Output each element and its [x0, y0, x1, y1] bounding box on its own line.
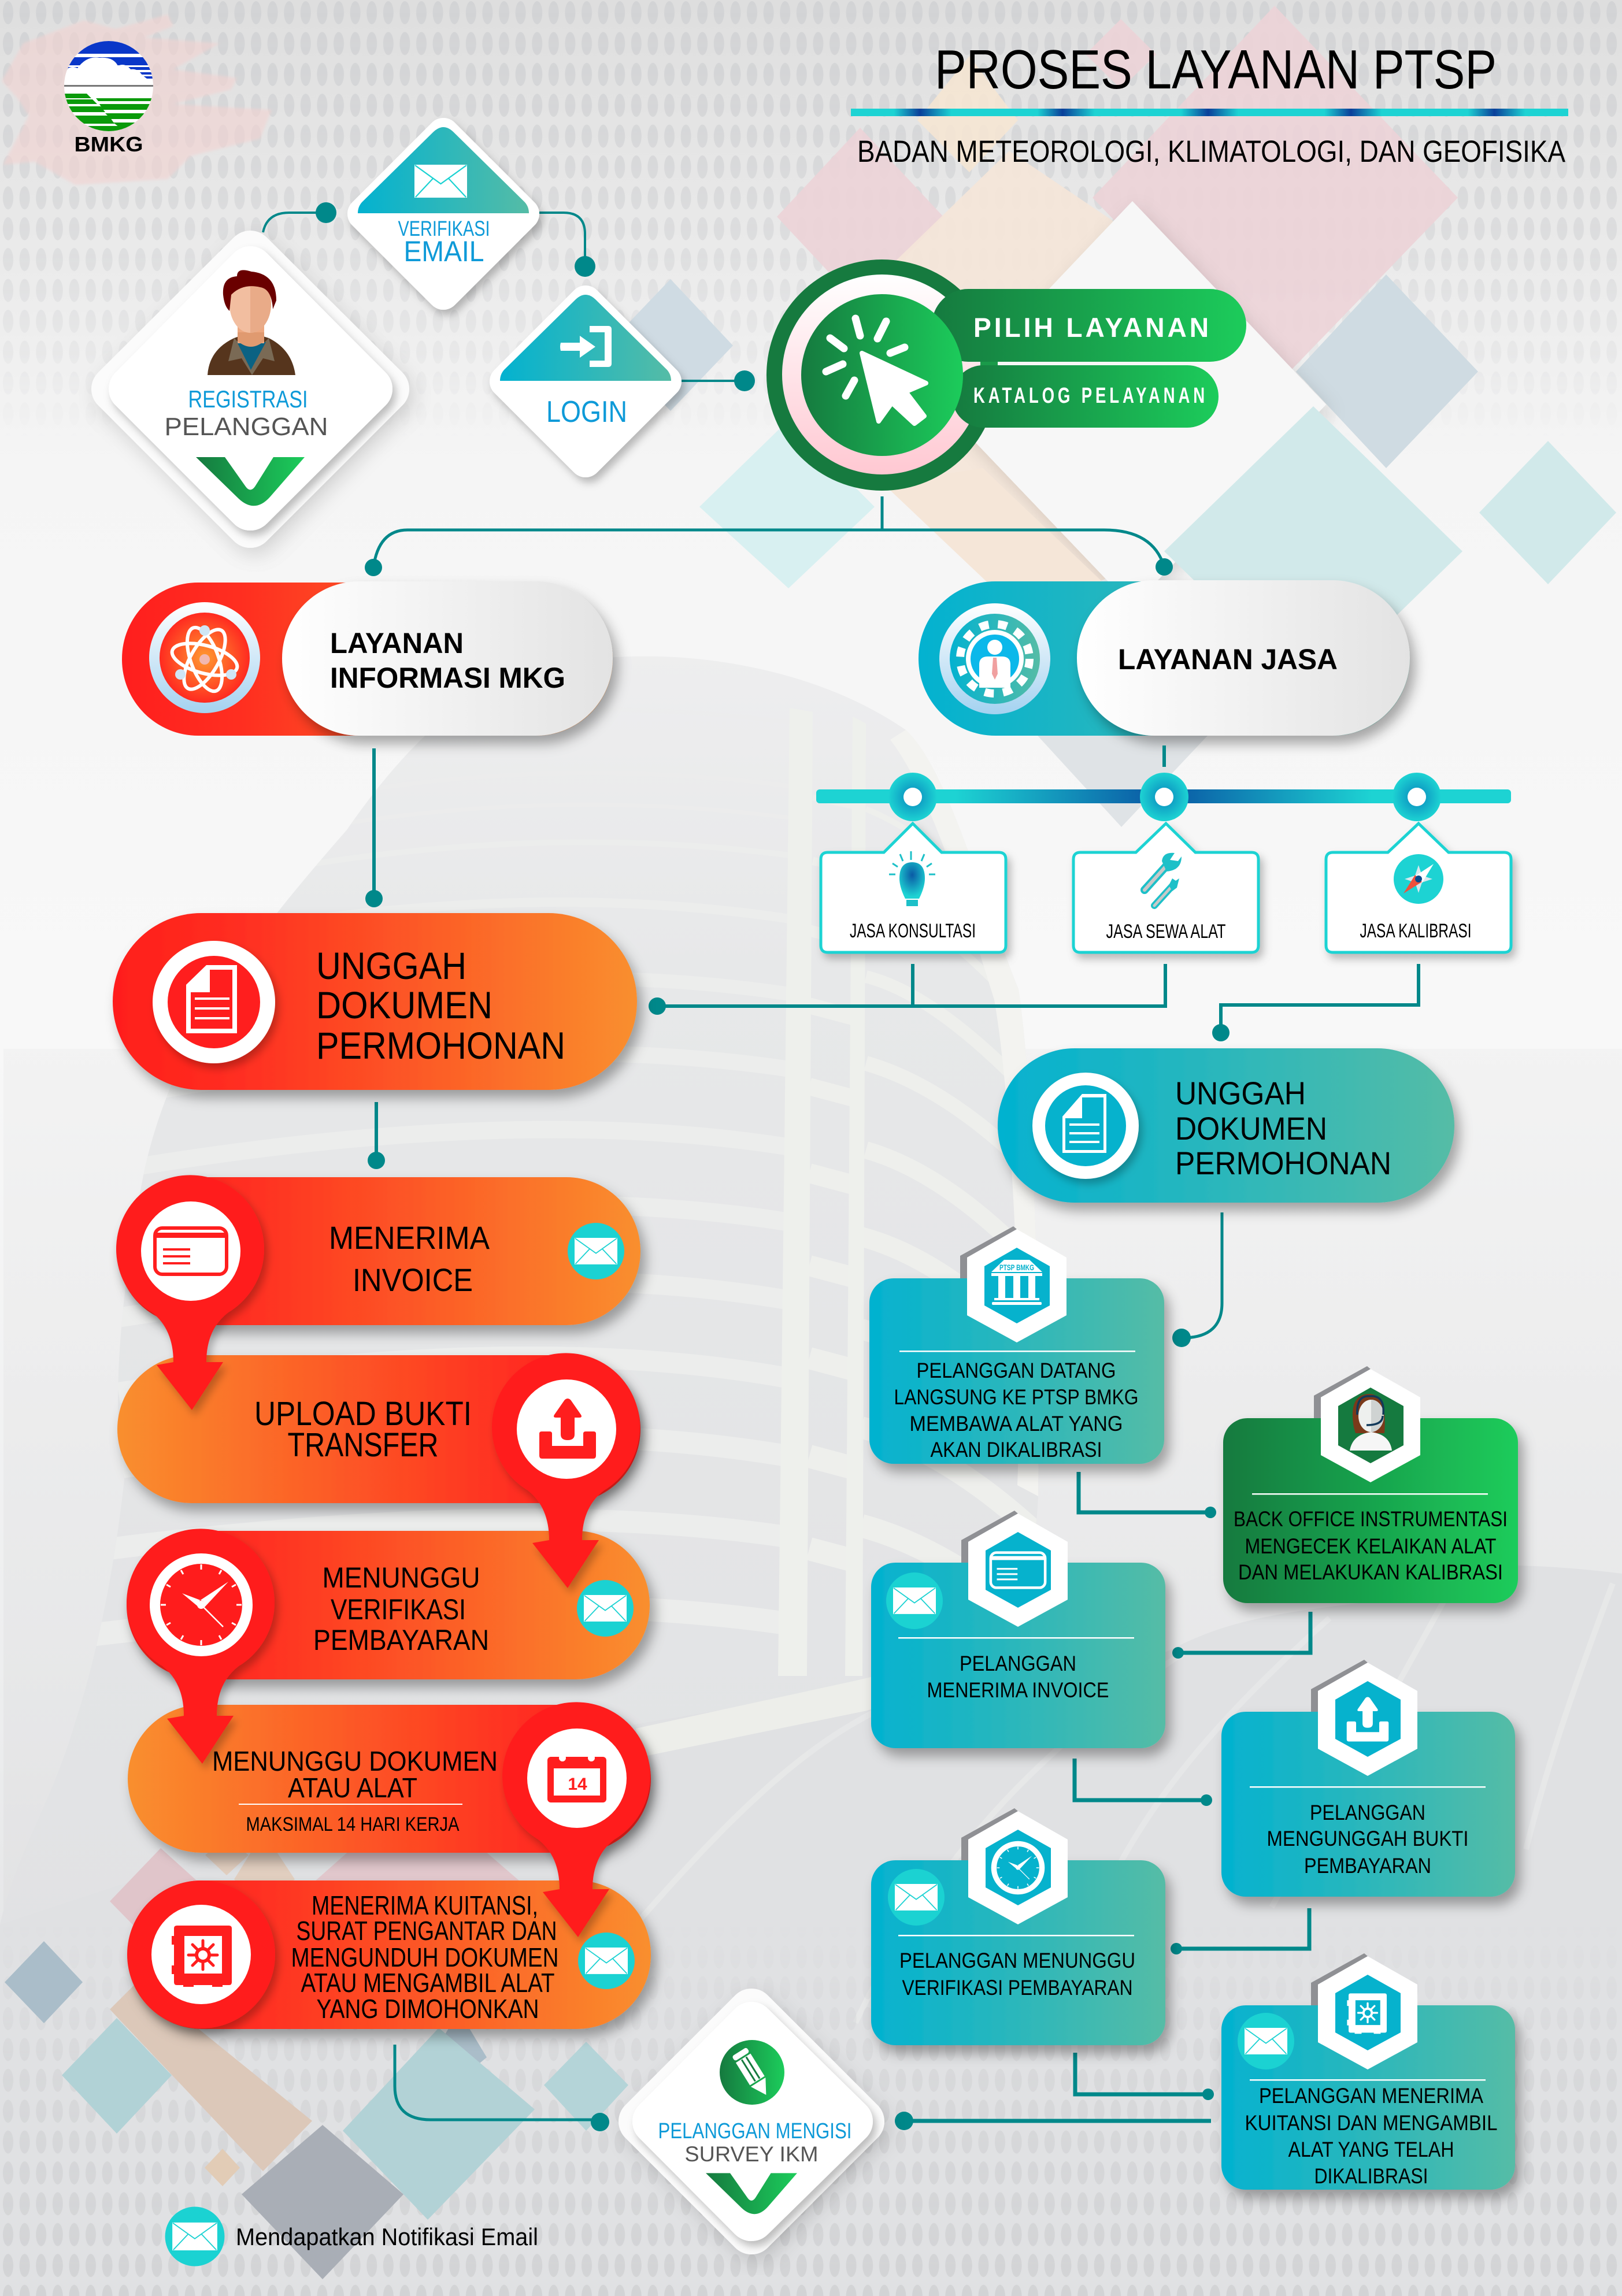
step: menunggu verifikasi pembayaran: PEMBAYARAN — [313, 1624, 489, 1656]
card: pelanggan mengunggah bukti — [1221, 1660, 1515, 1897]
panel: verifikasi email: VERIFIKASI — [398, 217, 490, 240]
icon: check mark — [196, 457, 305, 506]
card: pelanggan menerima kuitansi: ALAT YANG TELAH — [1288, 2138, 1454, 2161]
icon: clock — [994, 1844, 1042, 1892]
icon: email notification — [578, 1933, 635, 1989]
pill: katalog pelayanan — [952, 365, 1219, 428]
step: upload bukti transfer: UPLOAD BUKTI — [254, 1395, 472, 1433]
card: pelanggan mengunggah bukti: PEMBAYARAN — [1304, 1854, 1431, 1878]
icon: calendar — [547, 1755, 606, 1802]
step: upload bukti transfer — [254, 1353, 640, 1588]
icon: email notification — [577, 1580, 634, 1637]
step: menerima kuitansi: MENGUNDUH DOKUMEN — [291, 1942, 558, 1972]
panel: unggah dokumen permohonan teal: DOKUMEN — [1175, 1110, 1327, 1147]
step: menerima invoice: MENERIMA — [329, 1219, 490, 1256]
title: PROSES LAYANAN PTSP — [935, 39, 1497, 101]
panel: pilih layanan — [766, 259, 1246, 491]
panel: unggah dokumen permohonan red — [113, 913, 637, 1090]
panel: unggah dokumen permohonan teal: UNGGAH — [1175, 1075, 1306, 1111]
title underline bar — [851, 109, 1568, 116]
panel: unggah dokumen permohonan red: PERMOHONAN — [316, 1024, 565, 1067]
step: upload bukti transfer: TRANSFER — [288, 1426, 438, 1464]
background diamonds bottom left — [5, 1791, 628, 2279]
pill: pilih layanan — [932, 289, 1246, 362]
card: pelanggan menerima invoice: MENERIMA INVOICE — [927, 1678, 1109, 1702]
legend: Mendapatkan Notifikasi Email — [236, 2223, 538, 2250]
logo BMKG: BMKG — [74, 132, 143, 156]
icon: email notification — [888, 1869, 945, 1926]
panel: layanan jasa — [919, 580, 1410, 736]
icon: tools — [1145, 853, 1182, 906]
icon: email notification — [568, 1223, 624, 1279]
step: menerima kuitansi: YANG DIMOHONKAN — [317, 1994, 539, 2024]
panel: layanan informasi MKG — [122, 581, 613, 736]
card: pelanggan menerima invoice: PELANGGAN — [960, 1652, 1076, 1675]
card: pelanggan datang: PELANGGAN DATANG — [917, 1359, 1116, 1382]
card: pelanggan menerima kuitansi: DIKALIBRASI — [1314, 2164, 1428, 2188]
step: menunggu verifikasi pembayaran: VERIFIKASI — [331, 1593, 466, 1626]
step: menunggu verifikasi pembayaran: MENUNGGU — [323, 1561, 480, 1594]
icon: PTSP building: PTSP BMKG — [999, 1263, 1034, 1272]
panel: jasa konsultasi: JASA KONSULTASI — [850, 920, 976, 942]
icon: email notification — [886, 1572, 943, 1629]
panel: layanan informasi MKG: INFORMASI MKG — [330, 662, 565, 694]
panel: unggah dokumen permohonan red: DOKUMEN — [316, 984, 492, 1026]
icon: person — [208, 270, 295, 375]
step: menunggu verifikasi pembayaran — [127, 1529, 634, 1764]
panel: pilih layanan: KATALOG PELAYANAN — [973, 384, 1208, 408]
icon: gear person — [960, 624, 1030, 693]
panel: jasa sewa alat: JASA SEWA ALAT — [1106, 921, 1225, 943]
step: menunggu dokumen atau alat: MENUNGGU DOKUMEN — [212, 1746, 498, 1777]
step: menunggu dokumen atau alat: MAKSIMAL 14 HARI KERJA — [246, 1813, 460, 1835]
card: back office: DAN MELAKUKAN KALIBRASI — [1238, 1560, 1503, 1584]
card: pelanggan menerima kuitansi — [1221, 1953, 1515, 2190]
card: pelanggan mengunggah bukti: MENGUNGGAH BUKTI — [1267, 1827, 1468, 1850]
icon: safe — [1347, 1993, 1387, 2034]
card: back office: MENGECEK KELAIKAN ALAT — [1245, 1534, 1496, 1558]
panel: pilih layanan: PILIH LAYANAN — [973, 312, 1212, 343]
panel: login: LOGIN — [546, 395, 627, 429]
card: pelanggan datang — [869, 1226, 1164, 1464]
icon: email notification — [1238, 2013, 1294, 2069]
connectors top — [263, 202, 1173, 576]
panel: login — [500, 295, 671, 461]
panel: verifikasi email: EMAIL — [403, 235, 484, 268]
icon: PTSP building — [984, 1248, 1050, 1323]
card: pelanggan datang: LANGSUNG KE PTSP BMKG — [894, 1385, 1139, 1409]
icon: document — [186, 965, 237, 1033]
card: back office: BACK OFFICE INSTRUMENTASI — [1234, 1507, 1508, 1531]
panel: jasa bus bar — [816, 773, 1511, 821]
logo BMKG — [64, 41, 154, 156]
icon: upload — [539, 1399, 596, 1459]
card: pelanggan menerima invoice — [871, 1511, 1165, 1748]
legend — [165, 2207, 538, 2266]
card: back office — [1223, 1366, 1518, 1603]
panel: jasa konsultasi — [821, 824, 1006, 952]
background diamonds top right — [607, 6, 1616, 827]
card: pelanggan menunggu verifikasi: PELANGGAN MENUNGGU — [899, 1949, 1135, 1972]
icon: operator woman — [1338, 1388, 1403, 1463]
step: menunggu dokumen atau alat — [212, 1702, 650, 1937]
icon: pencil — [720, 2040, 784, 2105]
icon: clock — [155, 1559, 247, 1651]
panel: jasa kalibrasi — [1326, 824, 1511, 952]
icon: atom — [169, 623, 240, 696]
card: pelanggan menerima kuitansi: KUITANSI DAN MENGAMBIL — [1245, 2111, 1497, 2135]
icon: safe — [172, 1926, 232, 1987]
card: pelanggan datang: MEMBAWA ALAT YANG — [910, 1412, 1123, 1436]
panel: unggah dokumen permohonan red: UNGGAH — [316, 944, 466, 987]
icon: card — [155, 1228, 227, 1274]
card: pelanggan menerima kuitansi: PELANGGAN MENERIMA — [1259, 2084, 1483, 2108]
step: menerima invoice: INVOICE — [353, 1262, 473, 1298]
step: menunggu dokumen atau alat: ATAU ALAT — [288, 1773, 417, 1804]
step: menerima kuitansi: SURAT PENGANTAR DAN — [296, 1916, 557, 1946]
card: pelanggan mengunggah bukti: PELANGGAN — [1310, 1801, 1425, 1824]
panel: registrasi pelanggan — [114, 254, 386, 525]
icon: teal envelope header — [358, 127, 529, 213]
panel: survey IKM — [642, 2012, 861, 2231]
icon: cursor click — [801, 294, 963, 456]
icon: check mark — [706, 2173, 797, 2214]
panel: survey IKM: PELANGGAN MENGISI — [658, 2119, 852, 2143]
panel: unggah dokumen permohonan teal — [998, 1048, 1454, 1203]
pills: steps left column — [117, 1177, 651, 2029]
connectors — [365, 745, 1419, 2131]
card: pelanggan menunggu verifikasi — [871, 1808, 1165, 2045]
icon: teal login header — [500, 295, 671, 381]
card: pelanggan menunggu verifikasi: VERIFIKASI PEMBAYARAN — [902, 1976, 1133, 2000]
icon: calendar: 14 — [568, 1775, 587, 1794]
panel: registrasi pelanggan: REGISTRASI — [188, 385, 308, 413]
panel: layanan jasa: LAYANAN JASA — [1118, 643, 1338, 676]
step: menerima kuitansi: MENERIMA KUITANSI, — [312, 1890, 538, 1920]
panel: layanan informasi MKG: LAYANAN — [330, 627, 464, 659]
card: pelanggan datang: AKAN DIKALIBRASI — [931, 1438, 1102, 1462]
step: menerima invoice — [116, 1175, 624, 1410]
step: menerima kuitansi — [127, 1880, 635, 2028]
panel: registrasi pelanggan: PELANGGAN — [164, 413, 328, 441]
step: menerima kuitansi: ATAU MENGAMBIL ALAT — [301, 1968, 555, 1998]
panel: unggah dokumen permohonan teal: PERMOHONAN — [1175, 1145, 1391, 1181]
icon: upload — [1347, 1697, 1388, 1741]
icon: card — [991, 1553, 1045, 1587]
icon: document — [1062, 1094, 1106, 1153]
icon: compass — [1394, 854, 1443, 904]
pink brush stroke behind logo — [2, 14, 272, 185]
icon: bulb — [889, 851, 935, 906]
panel: jasa kalibrasi: JASA KALIBRASI — [1360, 920, 1472, 942]
panel: survey IKM: SURVEY IKM — [684, 2142, 819, 2166]
panel: verifikasi email — [358, 127, 529, 294]
panel: jasa sewa alat — [1073, 824, 1258, 952]
